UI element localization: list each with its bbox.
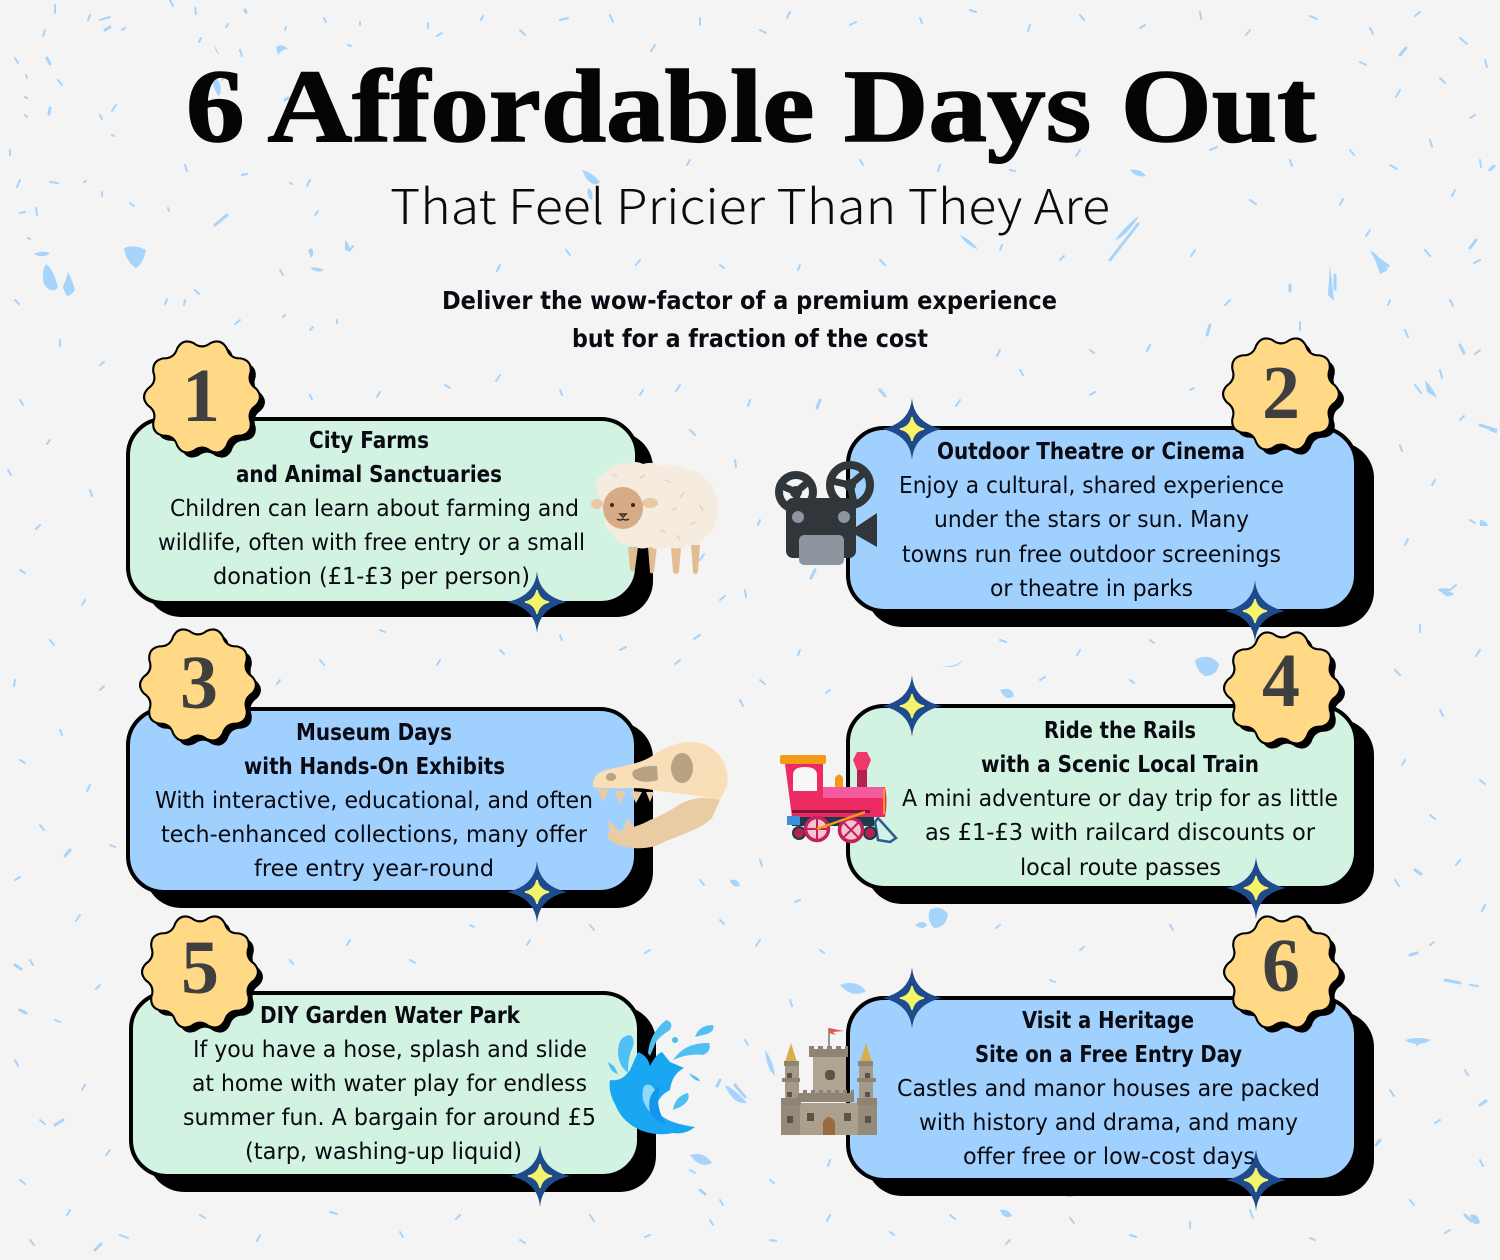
card text 4: as £1-£3 with railcard discounts or xyxy=(925,820,1316,846)
badge 5 xyxy=(142,916,263,1033)
icon: steam train xyxy=(780,752,896,842)
card text 3 xyxy=(155,720,593,882)
subtitle: That Feel Pricier Than They Are xyxy=(390,168,1110,238)
card text 4 xyxy=(902,718,1338,881)
card text 3: tech-enhanced collections, many offer xyxy=(161,822,588,848)
card text 3: free entry year-round xyxy=(254,856,494,882)
card text 5: at home with water play for endless xyxy=(192,1071,587,1097)
card text 5: summer fun. A bargain for around £5 xyxy=(183,1105,596,1131)
badge 5: 5 xyxy=(181,926,219,1010)
card text 3: with Hands-On Exhibits xyxy=(244,754,505,780)
card text 6: offer free or low-cost days xyxy=(963,1144,1255,1170)
card text 5: DIY Garden Water Park xyxy=(260,1003,521,1029)
badge 1 xyxy=(144,341,265,458)
badge 4: 4 xyxy=(1262,639,1300,723)
panel: outdoor theatre xyxy=(779,338,1374,642)
icon: dinosaur skull xyxy=(593,742,728,848)
icon: castle xyxy=(781,1028,877,1135)
card text 3: With interactive, educational, and often xyxy=(155,788,593,814)
stars 2 xyxy=(882,398,1285,642)
card text 6: Visit a Heritage xyxy=(1022,1008,1194,1034)
card text 1: City Farms xyxy=(309,428,429,454)
badge 1: 1 xyxy=(182,354,220,438)
card text 1: wildlife, often with free entry or a small xyxy=(158,530,585,556)
badge 3 xyxy=(140,629,261,746)
card text 1: donation (£1-£3 per person) xyxy=(213,564,530,590)
panel: diy water park xyxy=(131,916,713,1207)
card text 6: with history and drama, and many xyxy=(919,1110,1298,1136)
panel: heritage site xyxy=(781,916,1374,1211)
card text 6 xyxy=(897,1008,1320,1170)
card text 3: Museum Days xyxy=(296,720,452,746)
star 5 xyxy=(510,1145,570,1207)
card text 4: local route passes xyxy=(1020,855,1221,881)
card text 2: Enjoy a cultural, shared experience xyxy=(899,473,1284,499)
badge 2: 2 xyxy=(1262,351,1300,435)
card text 5: If you have a hose, splash and slide xyxy=(193,1037,587,1063)
card text 4: A mini adventure or day trip for as little xyxy=(902,786,1338,812)
card text 2 xyxy=(899,439,1284,602)
icon: sheep xyxy=(591,462,719,574)
intro text: but for a fraction of the cost xyxy=(572,324,928,353)
card text 2: or theatre in parks xyxy=(990,576,1193,602)
badge 2 xyxy=(1223,338,1344,455)
card text 2: under the stars or sun. Many xyxy=(934,507,1249,533)
panel: museum days xyxy=(128,629,728,923)
panel: ride the rails xyxy=(780,632,1374,919)
panel: city farms xyxy=(128,341,719,633)
card text 1 xyxy=(158,428,585,590)
intro text xyxy=(442,286,1057,353)
card text 1: and Animal Sanctuaries xyxy=(236,462,502,488)
badge 4 xyxy=(1224,632,1345,749)
card text 6: Castles and manor houses are packed xyxy=(897,1076,1320,1102)
card text 5 xyxy=(183,1003,596,1165)
star 1 xyxy=(507,571,567,633)
badge 6 xyxy=(1224,916,1345,1033)
card text 2: towns run free outdoor screenings xyxy=(902,542,1281,568)
card text 5: (tarp, washing-up liquid) xyxy=(245,1139,522,1165)
title: 6 Affordable Days Out xyxy=(186,49,1316,164)
icon: film camera xyxy=(779,465,877,565)
card text 6: Site on a Free Entry Day xyxy=(975,1042,1242,1068)
card text 2: Outdoor Theatre or Cinema xyxy=(937,439,1245,465)
intro text: Deliver the wow-factor of a premium experience xyxy=(442,286,1057,315)
stars 6 xyxy=(882,967,1286,1211)
badge 3: 3 xyxy=(180,641,218,725)
card text 4: Ride the Rails xyxy=(1044,718,1196,744)
badge 6: 6 xyxy=(1262,924,1300,1008)
star 3 xyxy=(507,861,567,923)
card text 1: Children can learn about farming and xyxy=(170,496,579,522)
card text 4: with a Scenic Local Train xyxy=(981,752,1259,778)
icon: water splash xyxy=(608,1020,713,1134)
stars 4 xyxy=(882,675,1286,919)
